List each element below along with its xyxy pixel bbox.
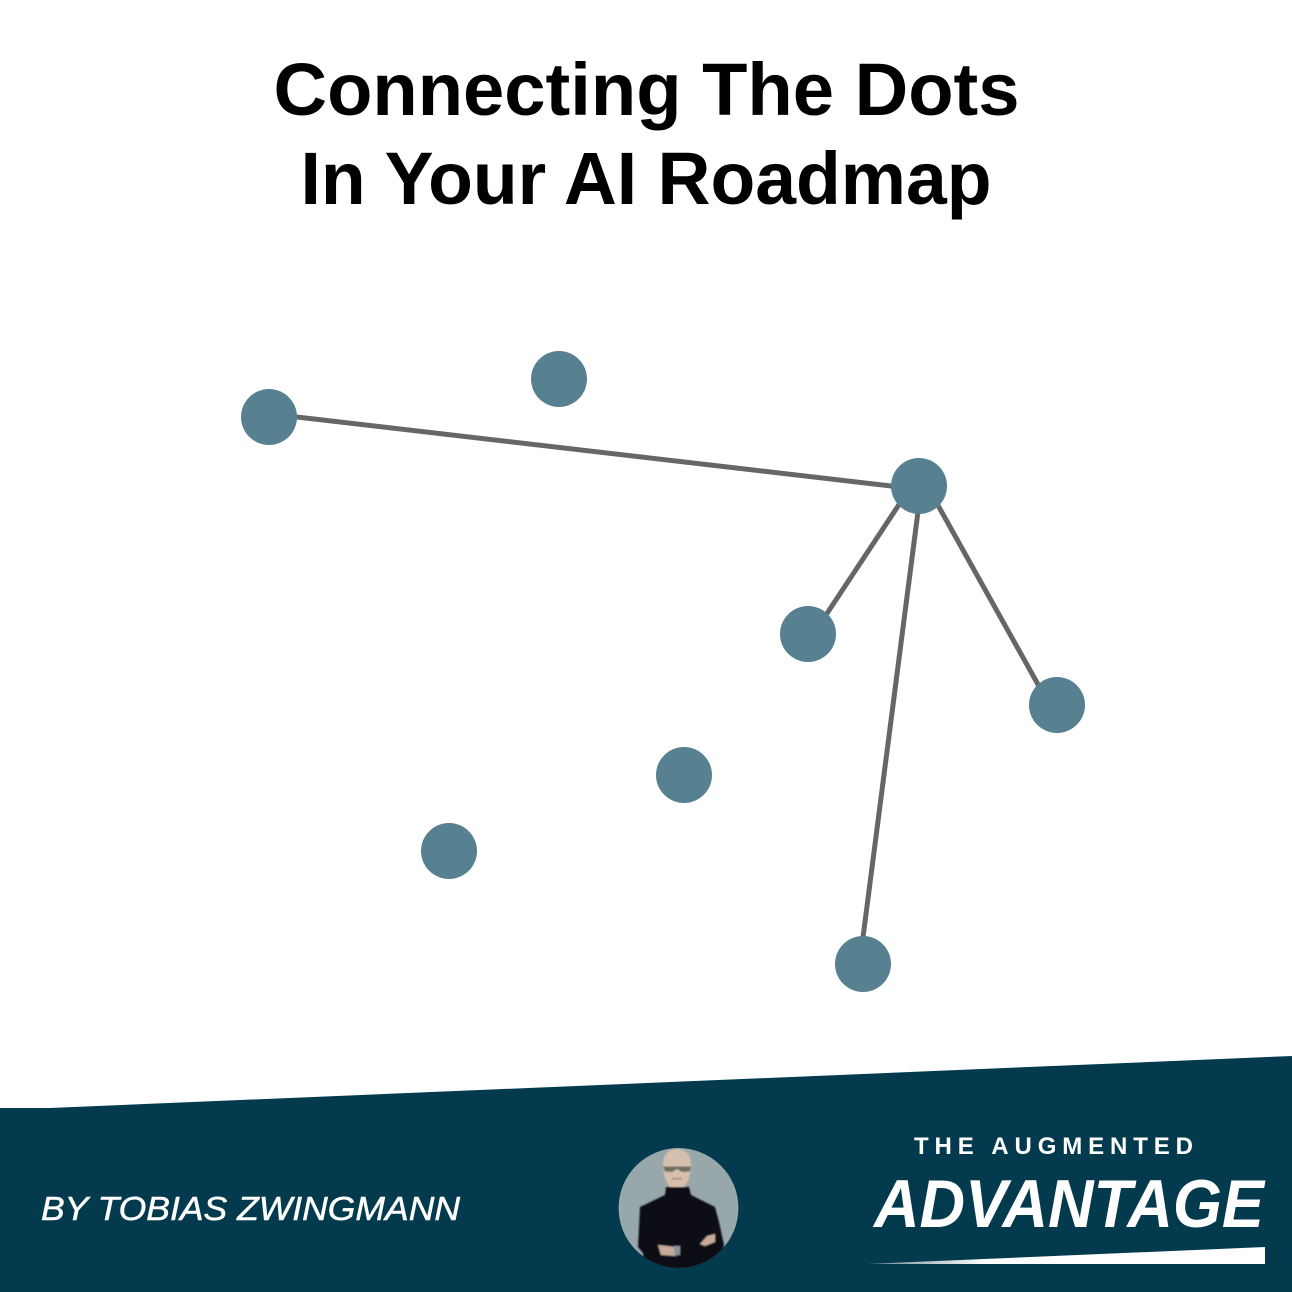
glasses (663, 1166, 691, 1172)
author byline: BY TOBIAS ZWINGMANN (41, 1190, 460, 1227)
mouth (672, 1178, 682, 1180)
logo swoosh (867, 1247, 1265, 1264)
title: Connecting The Dots (274, 48, 1020, 131)
head (663, 1149, 691, 1190)
network diagram (241, 351, 1085, 992)
logo: The Augmented Advantage (867, 1133, 1266, 1264)
connecting lines (285, 416, 1045, 945)
dots (241, 351, 1085, 992)
torso (638, 1187, 724, 1275)
arms (658, 1245, 676, 1256)
logo: The Augmented Advantage: ADVANTAGE (872, 1166, 1266, 1242)
title: In Your AI Roadmap (300, 137, 992, 220)
author portrait (618, 1148, 738, 1275)
logo: The Augmented Advantage: THE AUGMENTED (914, 1133, 1193, 1160)
footer band (0, 1056, 1292, 1292)
title (274, 48, 1020, 220)
